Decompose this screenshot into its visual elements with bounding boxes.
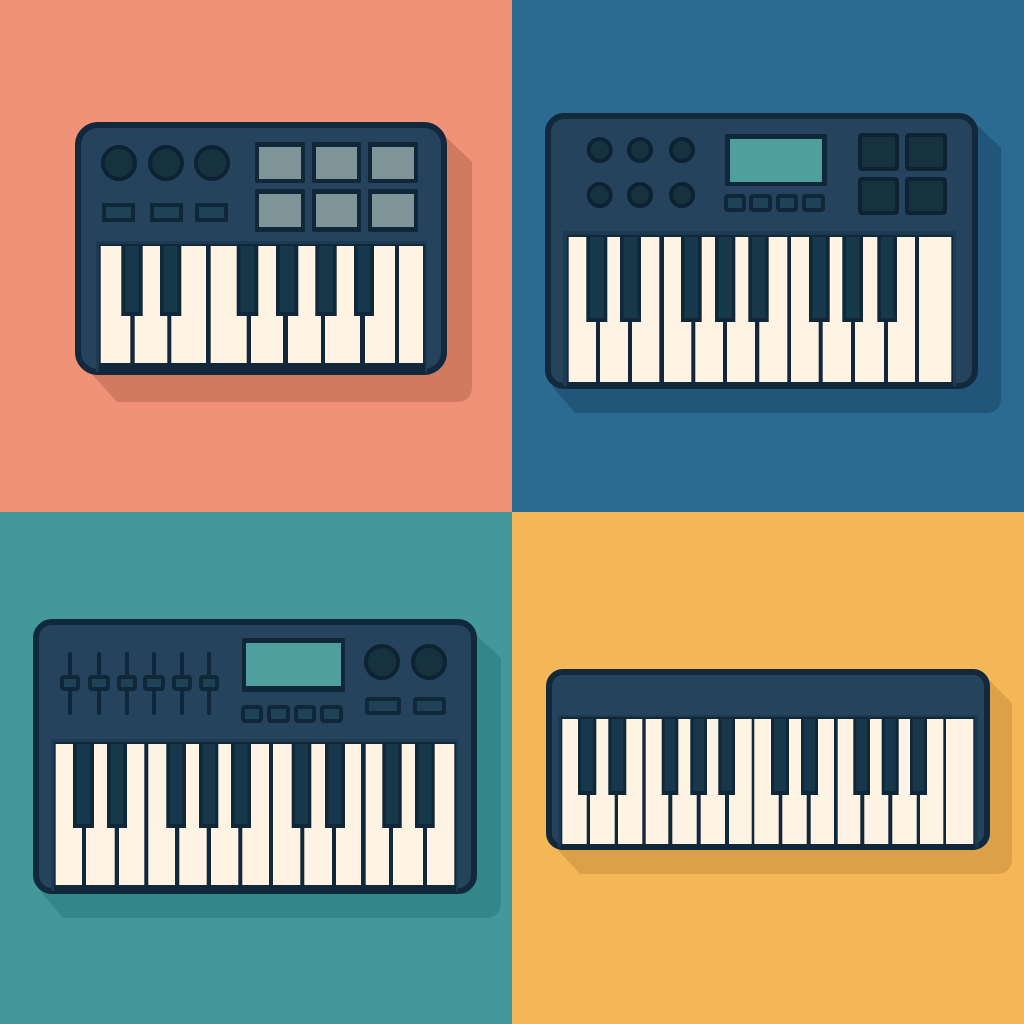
faders (62, 654, 217, 713)
white keys (569, 237, 951, 382)
keyboard 3: faders and screen controller (36, 622, 501, 918)
keyboard 1: knobs and pads controller (78, 125, 472, 402)
white keys (101, 246, 423, 363)
buttons (104, 205, 226, 220)
keyboard body (36, 622, 474, 891)
keyboard 4: plain key controller (549, 672, 1012, 874)
keyboard 2: screen and pads controller (548, 116, 1001, 413)
drop shadow (90, 136, 472, 402)
key bed (561, 717, 975, 850)
keyboard body (549, 672, 987, 847)
white keys (562, 719, 973, 844)
drop shadow (555, 679, 1012, 874)
key bed surround (558, 715, 978, 847)
key bed surround (563, 231, 956, 386)
buttons (367, 699, 444, 713)
key bed (567, 235, 953, 389)
key bed (54, 742, 456, 894)
screen (725, 134, 827, 186)
drum pads (255, 142, 418, 232)
knobs (589, 139, 693, 206)
black keys (578, 717, 927, 795)
knobs (103, 147, 228, 179)
key bed surround (51, 739, 458, 891)
panel: teal background (0, 512, 512, 1024)
black keys (586, 235, 897, 322)
panel: blue background (512, 0, 1024, 512)
screen (242, 638, 345, 692)
panel: yellow background (512, 512, 1024, 1024)
knobs (366, 646, 445, 678)
drum pads (860, 135, 945, 213)
small buttons (243, 707, 341, 721)
black keys (121, 244, 374, 316)
drop shadow (552, 124, 1001, 413)
key bed surround (96, 241, 427, 372)
drop shadow (40, 634, 501, 918)
keyboard body (78, 125, 444, 372)
white keys (56, 744, 454, 885)
buttons (726, 196, 823, 210)
key bed (99, 244, 425, 375)
black keys (73, 742, 435, 828)
panel: salmon background (0, 0, 512, 512)
keyboard body (548, 116, 975, 386)
